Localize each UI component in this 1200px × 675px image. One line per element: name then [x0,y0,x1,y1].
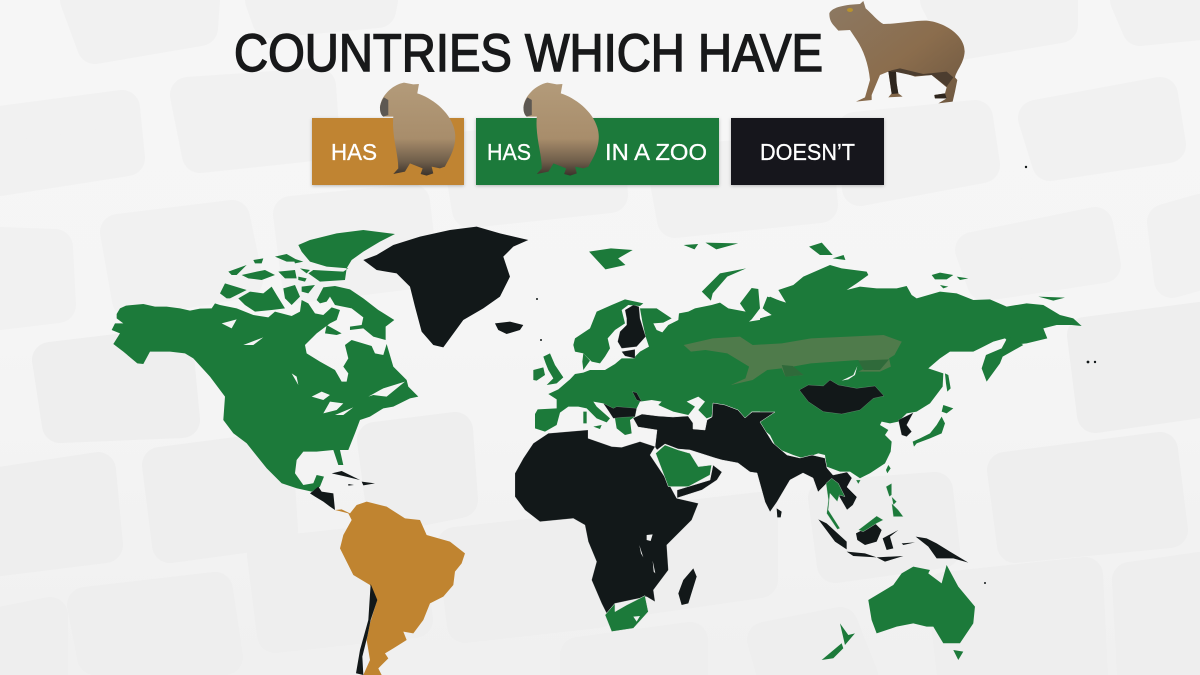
map: mediterranean islands [582,353,602,429]
icon: sitting capybara in green box [523,83,599,176]
title: COUNTRIES WHICH HAVE [234,24,823,83]
map: finland [618,305,646,348]
map: africa details and southern hemisphere [605,534,975,660]
legend: doesn't: DOESN’T [760,139,855,165]
icon: sitting capybara [380,83,455,176]
icon: standing capybara in title [829,1,965,103]
map: south africa [605,596,648,632]
map: australia [868,565,975,660]
capybara overlay on russia [684,335,902,385]
background tiles, upper [0,0,1200,312]
legend: has in a zoo: IN A ZOO [605,139,707,165]
small island dots [536,166,1096,584]
legend: has in a zoo: HAS [487,139,531,165]
map: sakhalin, japan and taiwan [886,373,953,473]
map: southeast asia [777,478,968,563]
map: east russia, china and japan [760,265,1082,478]
map: africa [515,430,698,613]
background tiles, lower [0,320,1200,675]
map: kamchatka [982,336,1023,382]
map: madagascar [678,568,697,605]
map: europe and west russia [533,288,785,448]
map: central america and caribbean [310,471,375,510]
map: sri lanka and indonesia [777,508,968,563]
map: new siberian islands and wrangel [932,273,1065,301]
map: saudi arabia [656,445,712,487]
map: scandinavia [573,299,643,363]
legend: has in a zoo [476,83,719,185]
legend: has: HAS [331,139,377,165]
map: africa, middle east, south asia [515,305,913,613]
map: chile [356,584,377,675]
map: yemen and oman [677,465,722,498]
map: greenland and iceland [363,227,528,347]
map: mongolia [799,380,884,414]
map: thailand, malaysia, philippines [826,478,903,532]
map: north america [112,230,418,492]
legend: doesn't [731,118,884,185]
map: korea [898,413,913,437]
map: new zealand [822,623,855,660]
map: south america [335,502,465,675]
map: balkans and baltics [603,349,642,418]
legend: has [312,83,464,185]
map: british isles [533,353,563,385]
map: arctic islands [589,243,845,301]
